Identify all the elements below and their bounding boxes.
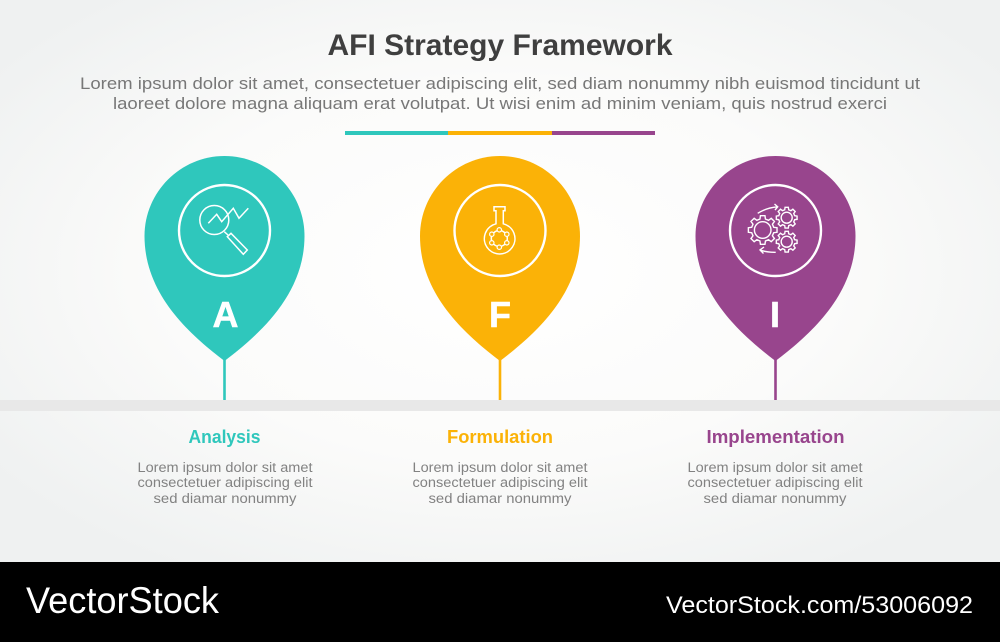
body: analysis: Lorem ipsum dolor sit amet (138, 460, 313, 475)
body: formulation: sed diamar nonummy (428, 491, 572, 506)
column: analysis (138, 427, 313, 506)
tricolor divider (345, 131, 655, 135)
intro text: laoreet dolore magna aliquam erat volutpat. Ut wisi enim ad minim veniam, quis nostrud exerci (113, 94, 887, 113)
body: implementation: sed diamar nonummy (704, 491, 847, 506)
pin: analysis (144, 156, 304, 400)
footer logo: VectorStock (26, 580, 219, 621)
icon: flask (484, 207, 515, 254)
body: formulation (412, 460, 588, 506)
footer bar (0, 562, 1000, 642)
heading: analysis: Analysis (188, 427, 260, 447)
column: formulation (412, 427, 588, 506)
footer url: VectorStock.com/53006092 (666, 592, 973, 619)
title: AFI Strategy Framework (328, 29, 673, 62)
body: formulation: consectetuer adipiscing elit (412, 475, 588, 490)
icon: gears with arrows (748, 204, 797, 254)
body: formulation: Lorem ipsum dolor sit amet (412, 460, 588, 475)
body: analysis: sed diamar nonummy (154, 491, 297, 506)
intro text: Lorem ipsum dolor sit amet, consectetuer adipiscing elit, sed diam nonummy nibh euismod tincidunt ut (80, 74, 920, 93)
letter A: A (212, 294, 238, 335)
horizontal band (0, 400, 1000, 411)
body: implementation: Lorem ipsum dolor sit amet (688, 460, 863, 475)
column: implementation (688, 427, 863, 506)
heading: formulation: Formulation (447, 427, 553, 447)
intro text (80, 74, 920, 113)
body: implementation (688, 460, 863, 506)
letter I: I (770, 294, 780, 335)
body: analysis: consectetuer adipiscing elit (138, 475, 313, 490)
body: implementation: consectetuer adipiscing elit (688, 475, 863, 490)
pin: implementation (696, 156, 856, 400)
letter F: F (489, 294, 511, 335)
icon: magnifier with trend line (200, 206, 248, 254)
body: analysis (138, 460, 313, 506)
heading: implementation: Implementation (706, 427, 844, 447)
pin: formulation (420, 156, 580, 400)
